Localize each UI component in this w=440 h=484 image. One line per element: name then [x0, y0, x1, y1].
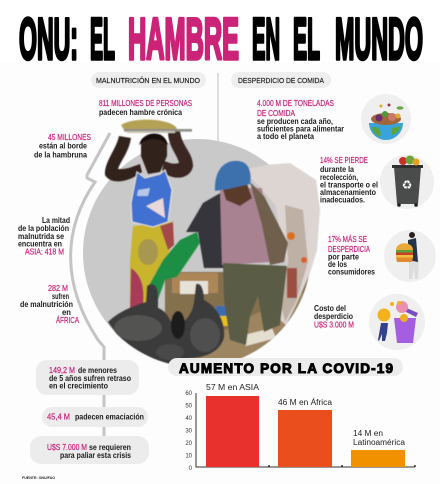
stat: costo: Costo del [314, 304, 346, 313]
heading: aumento por la covid-19: AUMENTO POR LA COVID-19 [179, 361, 393, 376]
stat: África [20, 283, 79, 325]
stat: 17% más: 17% MÁS SE [328, 234, 367, 244]
stat: costo: U$S 3.000 M [314, 320, 354, 330]
stat: 14% se pierde [320, 155, 378, 204]
stat: Asia: La mitad [42, 216, 70, 225]
column divider [217, 73, 219, 142]
stat: 4.000 M toneladas: DE COMIDA [257, 108, 295, 118]
callout: 149,2 M: en el crecimiento [49, 382, 108, 390]
icon: money in bin [369, 294, 425, 350]
bar: Latinoamérica: 14 M en [353, 429, 383, 438]
stat: 17% más: de los [328, 260, 347, 269]
photo: child and waste picker [105, 120, 320, 372]
y axis: 30 [185, 428, 193, 434]
stat: Asia [18, 216, 70, 256]
man [186, 192, 224, 268]
heading: malnutrición: MALNUTRICIÓN EN EL MUNDO [96, 76, 201, 85]
bar: África [278, 398, 333, 467]
callout: U$S 7.000 M: para paliar esta crisis [60, 451, 131, 460]
title: EN [252, 7, 280, 72]
callout: 149,2 M [36, 360, 139, 395]
bar: Latinoamérica [351, 429, 406, 467]
stat: África: de malnutrición [20, 300, 73, 309]
child: arms [105, 136, 142, 181]
heading: malnutrición [91, 72, 206, 88]
stat: 45 millones: 45 MILLONES [48, 132, 91, 142]
grey circle backdrop [83, 139, 311, 367]
stat: costo [314, 304, 354, 330]
stat: 17% más: por parte [328, 252, 359, 262]
stat: 14% se pierde: recolección, [320, 173, 358, 182]
bar: Asia: 57 M en ASIA [206, 383, 260, 392]
icon: food over globe [361, 94, 411, 144]
callout: U$S 7.000 M: se requieren [89, 443, 131, 452]
callout: 45,4 M [42, 407, 148, 427]
child: head [141, 133, 167, 174]
timeline connector line [71, 133, 110, 440]
stat: 4.000 M toneladas: a todo el planeta [257, 132, 314, 141]
source note: FUENTE: ONU/FAO [22, 475, 55, 480]
stat: 811 millones: 811 MILLONES DE PERSONAS [99, 98, 192, 108]
stat: 14% se pierde: durante la [320, 165, 354, 174]
title [19, 7, 423, 72]
bar: Asia [206, 383, 260, 467]
y axis: 20 [185, 441, 193, 447]
stat: costo: desperdicio [314, 312, 353, 321]
callout: 45,4 M: padecen emaciación [75, 412, 144, 422]
stat: 17% más: consumidores [328, 268, 375, 276]
stat: 4.000 M toneladas: 4.000 M DE TONELADAS [257, 98, 334, 108]
stat: 811 millones: padecen hambre crónica [99, 108, 182, 117]
title: EL [90, 7, 115, 72]
stat: 4.000 M toneladas [257, 98, 344, 141]
title: EL [293, 7, 320, 72]
callout: 149,2 M: 149,2 M [49, 365, 75, 375]
stat: 45 millones: están al borde [39, 142, 87, 150]
ground with rubbish [164, 271, 309, 364]
stat: Asia: de la población [18, 224, 69, 233]
icon: person with burger [384, 230, 436, 282]
heading: desperdicio: DESPERDICIO DE COMIDA [238, 78, 324, 85]
stat: 14% se pierde: almacenamiento [320, 188, 376, 197]
bar: África: 46 M en África [278, 398, 333, 407]
stat: Asia: encuentra en [18, 240, 62, 248]
stat: África: 282 M [48, 283, 68, 293]
stat: 45 millones [34, 132, 91, 160]
stat: 17% más: DESPERDICIA [328, 244, 370, 254]
stat: 14% se pierde: el transporte o el [320, 180, 378, 190]
callout: 149,2 M: de 5 años sufren retraso [49, 374, 131, 383]
tray with food [121, 120, 178, 131]
icon: rubbish bin: ♻ [402, 178, 412, 192]
bar: Latinoamérica: Latinoamérica [353, 438, 406, 447]
y axis: 0 [189, 466, 193, 472]
stat: 14% se pierde: inadecuados. [320, 196, 365, 204]
stat: 4.000 M toneladas: suficientes para alimentar [257, 124, 344, 134]
callout: U$S 7.000 M: U$S 7.000 M [47, 442, 87, 452]
callout: U$S 7.000 M [30, 436, 149, 464]
y axis: 50 [185, 404, 193, 410]
green cloth [148, 232, 200, 313]
child: blue top [131, 170, 172, 227]
callout: 149,2 M: de menores [78, 366, 117, 375]
man: face and cap [222, 184, 252, 206]
stat: Asia: ASIA: 418 M [25, 246, 64, 256]
title: ONU: [19, 7, 78, 72]
stat: 4.000 M toneladas: se producen cada año, [257, 117, 333, 126]
child: skirt [130, 222, 174, 314]
stat: 811 millones [99, 98, 192, 117]
callout: 45,4 M: 45,4 M [47, 412, 70, 422]
y axis: 10 [185, 454, 193, 460]
y axis: 60 [185, 391, 193, 397]
y axis [185, 391, 416, 472]
y axis: 40 [185, 416, 193, 422]
bag [243, 163, 320, 325]
stat: 45 millones: de la hambruna [34, 150, 87, 160]
stat: África: sufren [52, 292, 69, 301]
bar chart [185, 383, 416, 472]
stat: 14% se pierde: 14% SE PIERDE [320, 155, 368, 165]
heading: desperdicio [231, 72, 331, 88]
stat: África: ÁFRICA [56, 315, 79, 325]
stat: África: en [62, 308, 71, 317]
dark animals [108, 284, 224, 366]
title: HAMBRE [128, 7, 239, 72]
stat: 17% más [328, 234, 375, 276]
stat: Asia: malnutrida se [18, 232, 64, 241]
icon: rubbish bin [380, 155, 434, 209]
